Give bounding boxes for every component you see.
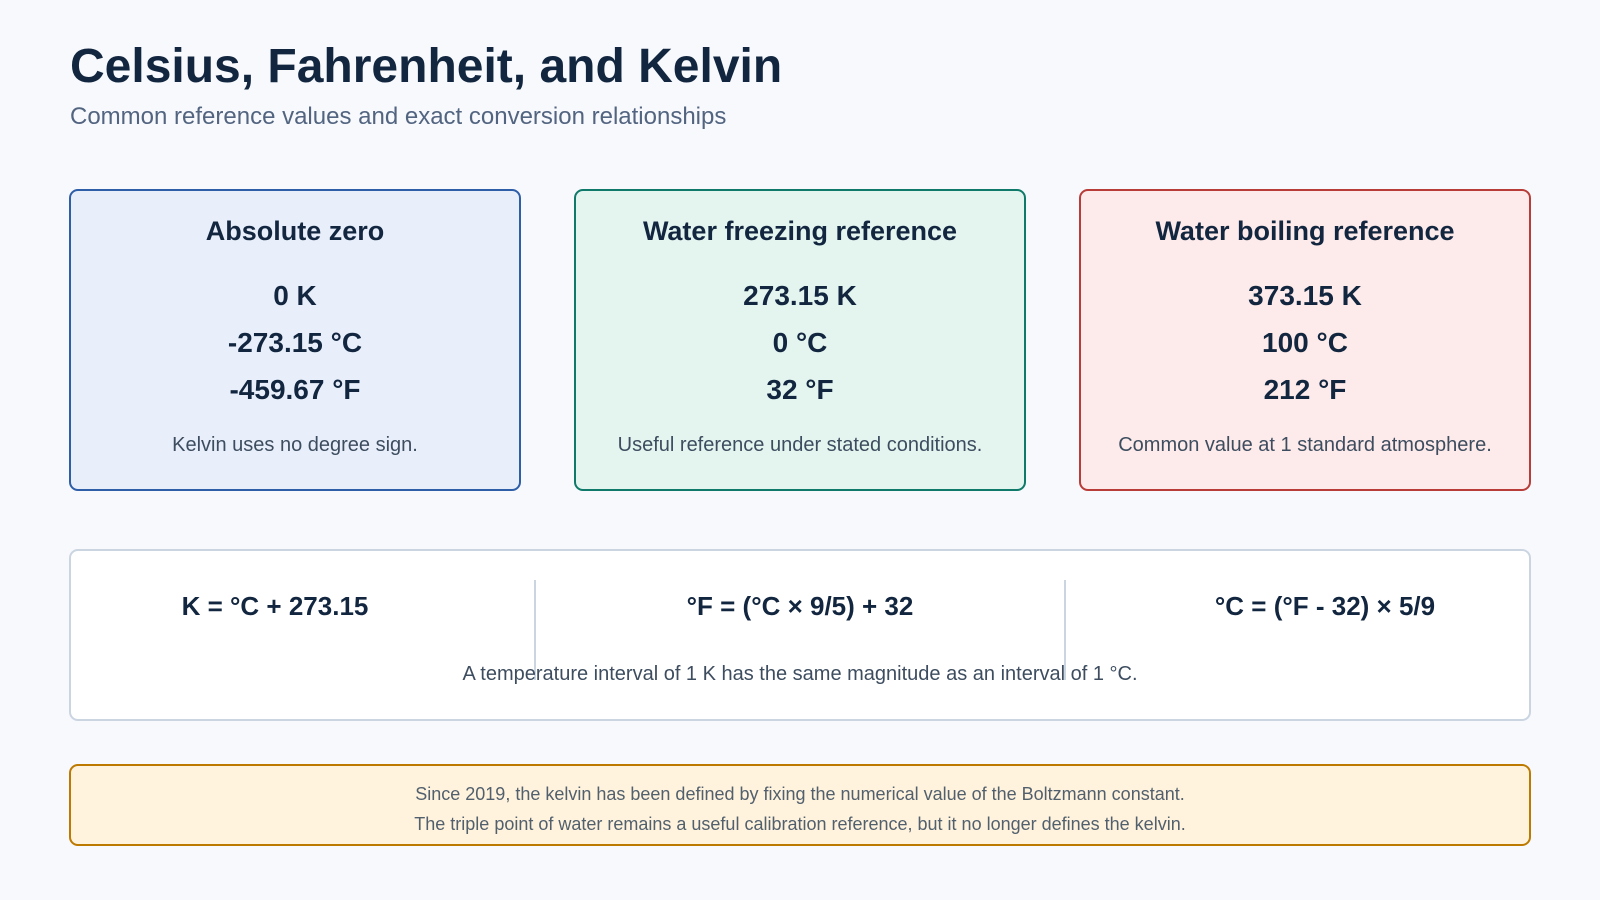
heading: water freezing: Water freezing reference (643, 216, 957, 246)
panel: water boiling reference (1079, 189, 1531, 491)
panel: conversion formulas (69, 549, 1531, 721)
formula: celsius from fahrenheit: °C = (°F - 32) × 5/9 (1215, 591, 1435, 621)
header (70, 40, 782, 130)
values: absolute zero: 0 K (273, 280, 317, 311)
values: absolute zero: -459.67 °F (229, 374, 361, 405)
note: water freezing: Useful reference under stated conditions. (618, 434, 982, 456)
callout line 2: The triple point of water remains a useful calibration reference, but it no longer defines the kelvin. (414, 814, 1186, 834)
panel: water freezing reference (574, 189, 1026, 491)
title: Celsius, Fahrenheit, and Kelvin (70, 40, 782, 93)
values: water boiling (1248, 280, 1362, 405)
values: water boiling: 100 °C (1262, 327, 1348, 358)
heading: water boiling: Water boiling reference (1155, 216, 1455, 246)
values: water freezing: 0 °C (773, 327, 827, 358)
values: absolute zero (228, 280, 362, 405)
note: water boiling: Common value at 1 standard atmosphere. (1118, 434, 1492, 456)
callout: kelvin definition (69, 764, 1531, 846)
formula: fahrenheit from celsius: °F = (°C × 9/5) + 32 (687, 591, 913, 621)
note: absolute zero: Kelvin uses no degree sign. (172, 434, 418, 456)
formula: kelvin from celsius: K = °C + 273.15 (182, 591, 368, 621)
values: water boiling: 373.15 K (1248, 280, 1362, 311)
subtitle: Common reference values and exact conversion relationships (70, 103, 726, 130)
values: water freezing: 32 °F (766, 374, 834, 405)
values: water freezing (743, 280, 857, 405)
values: water freezing: 273.15 K (743, 280, 857, 311)
panel: absolute zero (69, 189, 521, 491)
callout line 1: Since 2019, the kelvin has been defined by fixing the numerical value of the Boltzmann constant. (415, 784, 1185, 804)
heading: absolute zero: Absolute zero (206, 216, 384, 246)
interval note: A temperature interval of 1 K has the same magnitude as an interval of 1 °C. (462, 663, 1138, 685)
values: absolute zero: -273.15 °C (228, 327, 362, 358)
values: water boiling: 212 °F (1264, 374, 1346, 405)
